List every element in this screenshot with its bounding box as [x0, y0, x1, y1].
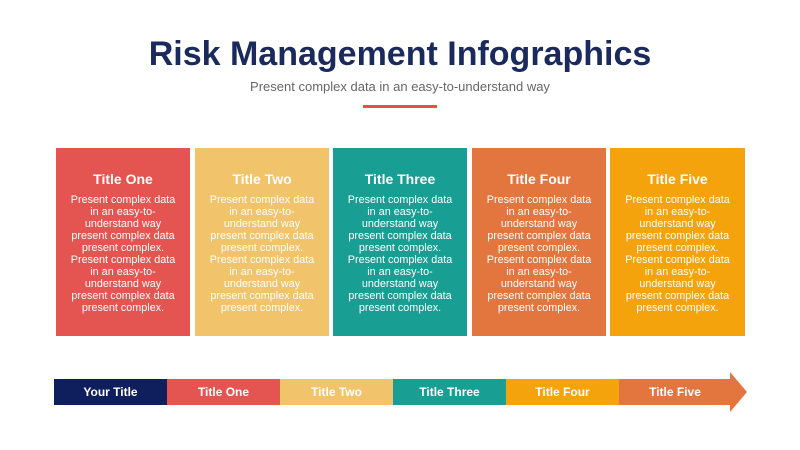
panel: title four: present complex data: [487, 290, 591, 302]
panel: title five: present complex.: [636, 242, 719, 254]
panel: title two: in an easy-to-: [229, 206, 295, 218]
panel: title one: understand way: [85, 218, 161, 230]
panel: title one: present complex data: [71, 230, 175, 242]
panel: title one: Present complex data: [71, 254, 175, 266]
panel: title two: Present complex data: [210, 194, 314, 206]
panel: title one: understand way: [85, 278, 161, 290]
panel: title three: present complex data: [348, 290, 452, 302]
panel: title three: Present complex data: [348, 254, 452, 266]
panel: title five: understand way: [639, 218, 716, 230]
panel: title four: Present complex data: [487, 254, 591, 266]
arrow timeline: Title Five: [649, 385, 701, 399]
panel: title four: [472, 148, 606, 336]
panel: title two: present complex data: [210, 230, 314, 242]
panel: title five: in an easy-to-: [645, 206, 710, 218]
panel: title three: Title Three: [365, 171, 435, 187]
accent line: [363, 105, 437, 108]
panel: title four: Present complex data: [487, 194, 591, 206]
panel: title three: present complex data: [348, 230, 452, 242]
panel: title two: present complex.: [221, 242, 303, 254]
panel: title two: understand way: [224, 278, 300, 290]
panel: title two: Title Two: [232, 171, 292, 187]
panel: title five: Present complex data: [625, 254, 730, 266]
panel: title three: [333, 148, 467, 336]
arrow timeline: Title Two: [311, 385, 362, 399]
arrow timeline: Title Three: [419, 385, 480, 399]
panel: title four: present complex.: [498, 242, 580, 254]
panel: title five: Title Five: [647, 171, 708, 187]
panel: title two: [195, 148, 329, 336]
panel: title four: present complex data: [487, 230, 591, 242]
arrow timeline: Title One: [198, 385, 249, 399]
panel: title five: understand way: [639, 278, 716, 290]
arrow head: [730, 372, 747, 412]
panel: title two: understand way: [224, 218, 300, 230]
panel: title one: Present complex data: [71, 194, 175, 206]
panel: title two: in an easy-to-: [229, 266, 295, 278]
arrow timeline: Your Title: [83, 385, 138, 399]
panel: title four: in an easy-to-: [506, 206, 572, 218]
panel: title three: present complex.: [359, 302, 441, 314]
panel: title five: [610, 148, 745, 336]
arrow timeline: Title Four: [535, 385, 590, 399]
panel: title five: present complex.: [636, 302, 719, 314]
panel: title two: Present complex data: [210, 254, 314, 266]
panel: title one: in an easy-to-: [90, 206, 156, 218]
title: Risk Management Infographics: [149, 35, 651, 73]
panel: title one: in an easy-to-: [90, 266, 156, 278]
panel: title five: in an easy-to-: [645, 266, 710, 278]
panel: title one: present complex data: [71, 290, 175, 302]
panel: title two: present complex data: [210, 290, 314, 302]
subtitle: Present complex data in an easy-to-understand way: [250, 79, 550, 94]
panel: title three: understand way: [362, 218, 438, 230]
panel: title three: in an easy-to-: [367, 206, 433, 218]
panel: title one: present complex.: [82, 242, 164, 254]
panel: title two: present complex.: [221, 302, 303, 314]
panel: title three: present complex.: [359, 242, 441, 254]
panel: title three: in an easy-to-: [367, 266, 433, 278]
panel: title four: present complex.: [498, 302, 580, 314]
panel: title five: present complex data: [626, 290, 729, 302]
panel: title one: [56, 148, 190, 336]
panel: title five: Present complex data: [625, 194, 730, 206]
panel: title three: Present complex data: [348, 194, 452, 206]
panel: title one: Title One: [93, 171, 153, 187]
panel: title four: understand way: [501, 278, 577, 290]
panel: title four: understand way: [501, 218, 577, 230]
panel: title three: understand way: [362, 278, 438, 290]
panel: title four: in an easy-to-: [506, 266, 572, 278]
panel: title five: present complex data: [626, 230, 729, 242]
panel: title four: Title Four: [507, 171, 571, 187]
panel: title one: present complex.: [82, 302, 164, 314]
